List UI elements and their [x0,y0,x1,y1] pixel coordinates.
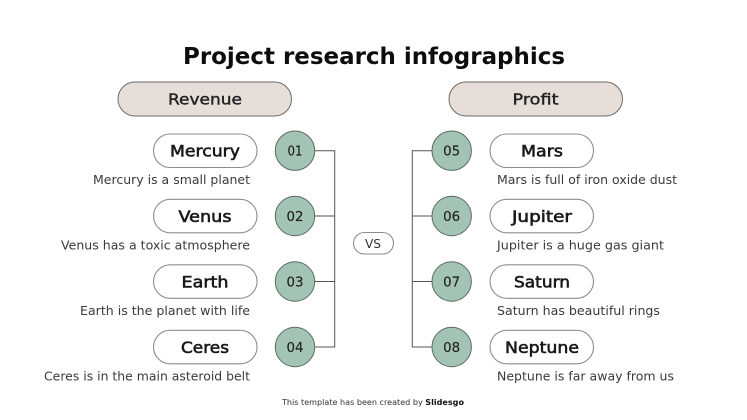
heading: Revenue: Revenue [168,90,242,108]
heading: Profit [449,82,622,116]
callout: VS: VS [365,237,381,251]
item 08: Neptune: 08 [443,341,460,356]
callout: VS [354,232,394,254]
item 05: Mars: 05 [443,144,460,160]
item 01: Mercury: 01 [288,144,302,160]
connector: left bracket [315,151,335,347]
item 03: Earth: Earth [182,272,228,291]
panel: Revenue column [44,82,315,383]
item 05: Mars: Mars [521,142,563,160]
item 03: Earth: 03 [286,275,304,290]
item 07: Saturn: 07 [443,275,460,290]
item 02: Venus: 02 [286,210,304,225]
heading: Profit: Profit [512,90,559,108]
item 04: Ceres: Ceres [181,338,229,357]
item 06: Jupiter: Jupiter is a huge gas giant [496,238,664,252]
item 08: Neptune: Neptune [505,338,579,357]
item 02: Venus [61,196,315,252]
item 05: Mars: Mars is full of iron oxide dust [497,173,677,187]
item 04: Ceres: 04 [286,341,304,356]
item 04: Ceres: Ceres is in the main asteroid belt [44,369,250,383]
item 07: Saturn: Saturn has beautiful rings [497,304,660,318]
item 03: Earth: Earth is the planet with life [80,304,250,318]
item 06: Jupiter: Jupiter [511,207,572,226]
footer credit: This template has been created by Slidesgo [281,398,464,407]
item 06: Jupiter [432,196,664,252]
item 01: Mercury: Mercury is a small planet [93,173,250,187]
item 07: Saturn: Saturn [514,272,570,291]
item 01: Mercury [93,131,315,187]
item 08: Neptune: Neptune is far away from us [497,369,674,383]
panel: Profit column [432,82,677,383]
item 06: Jupiter: 06 [443,210,460,225]
item 01: Mercury: Mercury [170,142,240,160]
item 02: Venus: Venus [178,207,232,226]
item 07: Saturn [432,262,660,318]
title: Project research infographics [183,42,565,70]
item 05: Mars [432,131,677,187]
item 03: Earth [80,262,315,318]
item 04: Ceres [44,327,315,383]
connector: right bracket [412,151,432,347]
item 08: Neptune [432,327,674,383]
heading: Revenue [118,82,292,116]
item 02: Venus: Venus has a toxic atmosphere [61,238,250,252]
